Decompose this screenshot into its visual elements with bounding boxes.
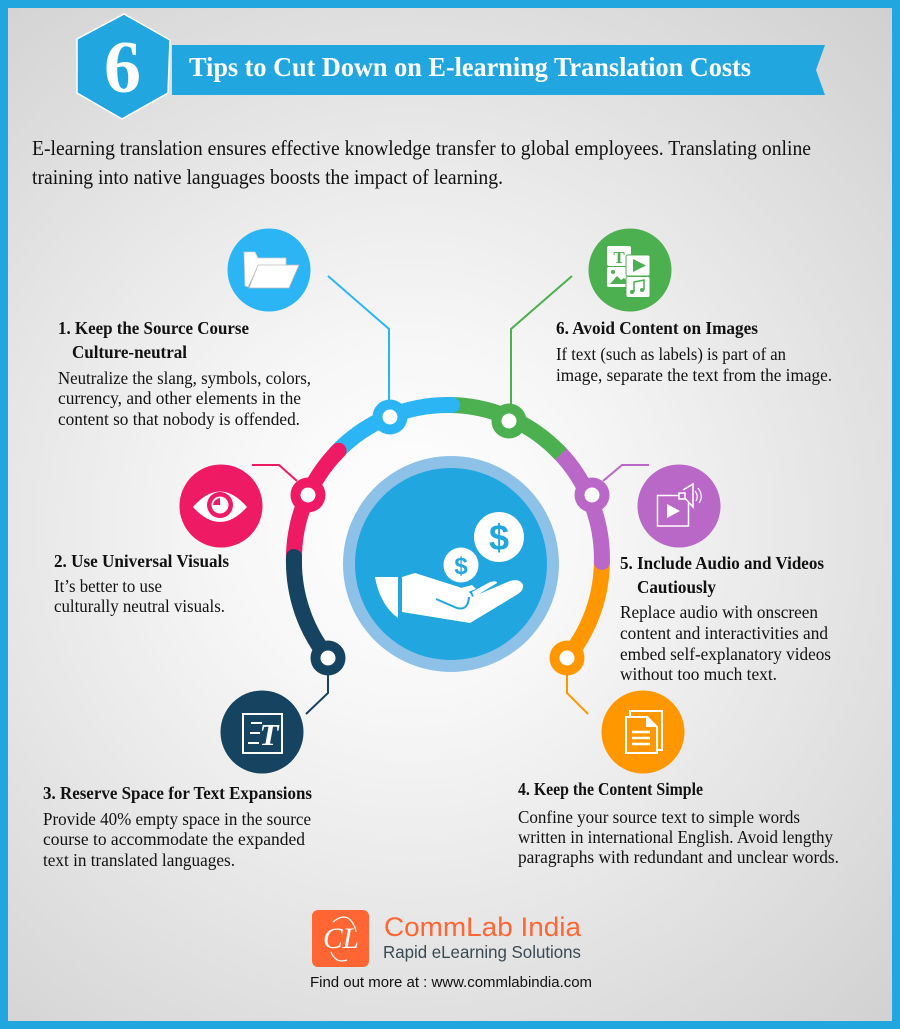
sleeve	[375, 577, 398, 618]
tip 5 body: without too much text.	[620, 664, 777, 684]
tip 2	[54, 464, 262, 616]
badge number: 6	[104, 27, 141, 109]
title: Tips to Cut Down on E-learning Translation Costs	[189, 52, 751, 82]
ring nodes	[290, 400, 610, 676]
small coin	[444, 548, 478, 582]
tagline: Rapid eLearning Solutions	[383, 942, 581, 962]
tip 2 heading: 2. Use Universal Visuals	[54, 551, 229, 571]
intro text	[32, 136, 811, 189]
tip 3 body: Provide 40% empty space in the source	[43, 809, 311, 829]
tip 1	[58, 228, 311, 429]
tip 3 body: course to accommodate the expanded	[43, 829, 305, 849]
icon: text expansion	[220, 690, 304, 774]
hexagon badge	[77, 14, 170, 119]
footer logo	[310, 910, 592, 991]
tip 1 body: currency, and other elements in the	[58, 388, 301, 408]
tip 5 body	[620, 602, 831, 684]
logo mark	[312, 910, 369, 967]
tip 2 body	[54, 576, 225, 616]
tip 3	[43, 690, 312, 870]
tip 6 heading: 6. Avoid Content on Images	[556, 318, 758, 338]
tip 5 body: Replace audio with onscreen	[620, 602, 818, 622]
pink arc	[294, 451, 338, 563]
tip 5	[620, 464, 831, 684]
large coin	[474, 512, 524, 562]
tip 5 heading	[620, 553, 824, 597]
icon: text expansion: T	[260, 717, 280, 752]
intro text: E-learning translation ensures effective knowledge transfer to global employees. Translating online	[32, 136, 811, 160]
tip 4 heading: 4. Keep the Content Simple	[518, 779, 703, 799]
navy arc	[294, 557, 328, 658]
tip 3 heading: 3. Reserve Space for Text Expansions	[43, 783, 312, 803]
green arc	[450, 405, 561, 454]
connector lines	[252, 276, 649, 714]
hand	[402, 573, 523, 623]
logo mark: CL	[323, 922, 359, 955]
tip 6	[556, 228, 832, 385]
light blue arc	[336, 405, 452, 453]
tip 6 body: image, separate the text from the image.	[556, 365, 832, 385]
tip 4 body: paragraphs with redundant and unclear words.	[518, 847, 839, 867]
tip 5 heading: Cautiously	[637, 577, 716, 597]
title ribbon	[172, 45, 825, 95]
icon: media content: T	[613, 248, 625, 267]
orange arc	[567, 560, 602, 658]
tip 1 body: content so that nobody is offended.	[58, 409, 300, 429]
tip 2 body: It’s better to use	[54, 576, 162, 596]
purple arc	[558, 451, 602, 562]
tip 3 body: text in translated languages.	[43, 850, 235, 870]
brand name: CommLab India	[384, 912, 582, 942]
tip 1 heading	[58, 318, 249, 362]
tip 4 body: written in international English. Avoid lengthy	[518, 827, 833, 847]
tip 1 heading: Culture-neutral	[72, 342, 187, 362]
tip 5 body: embed self-explanatory videos	[620, 644, 831, 664]
icon: audio and video	[638, 464, 720, 548]
fingers	[461, 581, 497, 597]
tip 1 heading: 1. Keep the Source Course	[58, 318, 249, 338]
icon: eye	[180, 464, 262, 548]
tip 4	[518, 690, 839, 867]
icon: media content	[588, 228, 672, 312]
header	[77, 14, 825, 119]
tip 4 body	[518, 807, 839, 867]
tip 4 body: Confine your source text to simple words	[518, 807, 800, 827]
tip 6 body	[556, 344, 832, 385]
segmented ring	[294, 405, 602, 658]
palm crease	[436, 597, 469, 609]
tip 3 body	[43, 809, 311, 870]
tip 5 heading: 5. Include Audio and Videos	[620, 553, 824, 573]
website line: Find out more at : www.commlabindia.com	[310, 975, 592, 991]
tip 6 body: If text (such as labels) is part of an	[556, 344, 786, 364]
icon: folder	[228, 228, 310, 312]
tip 5 body: content and interactivities and	[620, 623, 828, 643]
tip 1 body	[58, 368, 311, 429]
tip 1 body: Neutralize the slang, symbols, colors,	[58, 368, 311, 388]
central emblem: hand with coins: $	[454, 553, 468, 580]
tip 2 body: culturally neutral visuals.	[54, 596, 225, 616]
central emblem: hand with coins: $	[489, 517, 509, 558]
intro text: training into native languages boosts the impact of learning.	[32, 165, 503, 189]
icon: documents	[602, 690, 684, 774]
central emblem: hand with coins	[343, 456, 559, 672]
